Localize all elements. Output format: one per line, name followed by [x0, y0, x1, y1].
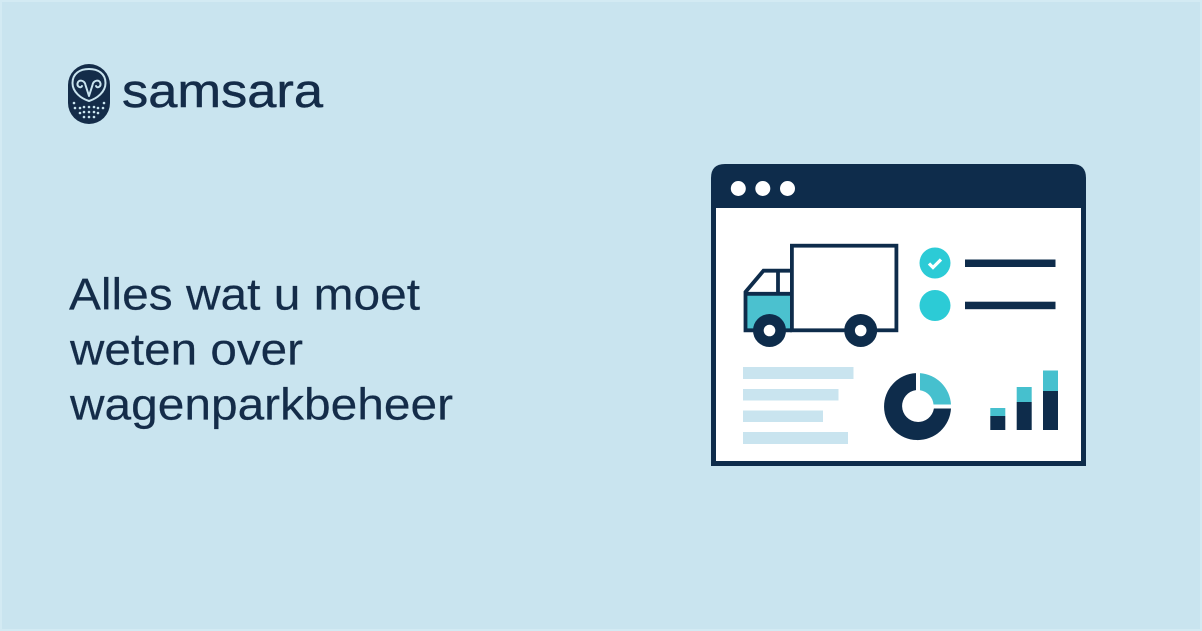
icon: checked item [920, 248, 950, 278]
checklist [920, 248, 1056, 321]
logo: samsara [68, 64, 324, 124]
window control dots [731, 181, 795, 196]
heading [69, 270, 453, 430]
bar chart [990, 370, 1058, 430]
logo wordmark: samsara [122, 64, 324, 117]
donut chart [884, 373, 951, 440]
heading: Alles wat u moet [69, 270, 421, 320]
heading: weten over [69, 326, 303, 374]
text placeholder bars [743, 367, 854, 444]
window content area [716, 208, 1081, 461]
illustration: dashboard window [711, 164, 1086, 466]
icon: delivery truck [745, 246, 896, 347]
icon: owl [68, 64, 110, 124]
heading: wagenparkbeheer [69, 380, 453, 430]
window frame [711, 164, 1086, 466]
